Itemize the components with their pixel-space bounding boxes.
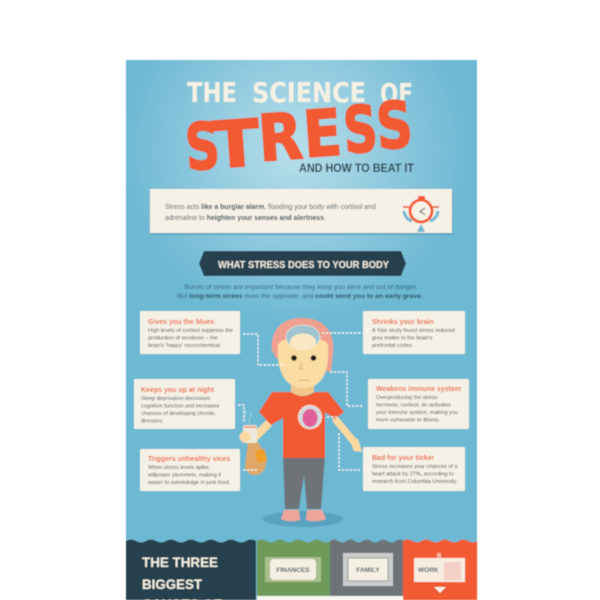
card: keeps you up at night: Sleep deprivation decreases [141,396,211,402]
hand holding cup [240,432,250,442]
card: weakens immune system [368,379,469,429]
card: keeps you up at night: cognitive function and increases [141,404,220,410]
title: stress: S [374,89,415,165]
panel: three biggest causes [126,540,256,600]
subtitle: and how to beat it: AND HOW TO BEAT IT [299,163,414,175]
arms [254,424,268,438]
card: shrinks your brain: Shrinks your brain [372,319,434,326]
card: weakens immune system: Weakens immune system [376,386,461,393]
card: keeps you up at night: chances of developing chronic [141,411,215,417]
dashed connectors [238,333,363,470]
text: intro: adrenaline to heighten your senses and alertness. [165,215,326,222]
panel: intro callout [150,189,453,235]
title: stress [183,89,415,186]
shadow [263,511,343,527]
card: bad for your ticker: Stress increases your chances of a [372,464,459,470]
text: intro: Stress acts like a burglar alarm, flooding your body with cortisol and [165,204,376,211]
cup [243,425,257,443]
card: shrinks your brain: prefrontal cortex. [372,343,414,349]
panel: family [330,540,404,600]
eyes [291,355,297,361]
panel: family: FAMILY [356,567,380,574]
card: weakens immune system: your immune system, making you [376,410,458,416]
junk food bag [245,442,266,475]
panel: work [403,540,477,600]
card: gives you the blues: High levels of cortisol suppress the [148,328,233,334]
title: the science of: SCIENCE [252,76,366,109]
heart badge [298,406,322,428]
card: bad for your ticker [363,447,465,491]
card: gives you the blues: production of serotonin – the [148,336,218,342]
card: triggers unhealthy vices: Triggers unhealthy vices [148,456,230,463]
card: keeps you up at night [134,379,235,429]
feet [281,510,300,521]
card: gives you the blues: brain's 'happy' neurochemical. [148,343,222,349]
legs [283,456,325,509]
arrow [434,587,446,593]
title: stress: R [256,100,305,177]
card: triggers unhealthy vices: When stress levels spike, [148,465,211,471]
card: shrinks your brain: A Yale study found stress reduced [372,328,455,334]
card: keeps you up at night: illnesses. [141,418,164,424]
text: intro to body section: But long-term stress does the opposite, and could send you to an early grave. [177,293,423,300]
right hand [349,438,362,452]
card: gives you the blues [140,311,240,354]
panel: finances [257,540,331,600]
person illustration [240,318,368,527]
title: stress: S [183,110,222,186]
card: weakens immune system: more vulnerable to illness. [376,418,440,424]
title: stress: T [210,107,262,184]
title: stress: E [301,96,344,173]
icon: alarm clock [403,196,439,232]
brain [286,325,320,350]
banner: what stress does to your body: WHAT STRESS DOES TO YOUR BODY [218,260,389,271]
card: gives you the blues: Gives you the blues [148,319,214,326]
title: stress: S [341,93,380,169]
nose and mouth [299,362,309,381]
card: bad for your ticker: heart attack by 27%, according to [372,472,454,478]
pointing bracket [366,448,368,457]
panel: three biggest causes: BIGGEST [142,576,202,592]
title: the science of: OF [380,77,413,110]
panel: work: WORK [418,567,439,574]
title: the science of [187,76,413,110]
steam [244,410,251,424]
panel: finances: FINANCES [276,567,310,574]
head [278,338,328,388]
panel: blue background [126,60,477,600]
card: weakens immune system: hormone, cortisol, de-activates [376,402,451,408]
card: keeps you up at night: Keeps you up at night [141,387,215,394]
banner: what stress does to your body [199,251,406,276]
title: the science of: THE [187,76,237,109]
card: shrinks your brain: grey matter in the brain's [372,336,433,342]
white strip [257,596,403,600]
text: intro to body section: Bursts of stress are important because they keep you alive and out of danger. [184,284,418,291]
neck [291,380,314,396]
card: weakens immune system: Overproducing the stress [376,395,438,401]
shirt [259,392,344,458]
card: bad for your ticker: research from Columbia University. [372,479,458,485]
panel: three biggest causes: THE THREE [142,554,218,570]
card: bad for your ticker: Bad for your ticker [372,455,435,462]
card: triggers unhealthy vices [140,449,240,491]
card: shrinks your brain [363,311,465,354]
card: triggers unhealthy vices: easier to overindulge in junk food. [148,480,231,486]
card: triggers unhealthy vices: willpower plummets, making it [147,472,222,478]
hair [272,318,333,372]
